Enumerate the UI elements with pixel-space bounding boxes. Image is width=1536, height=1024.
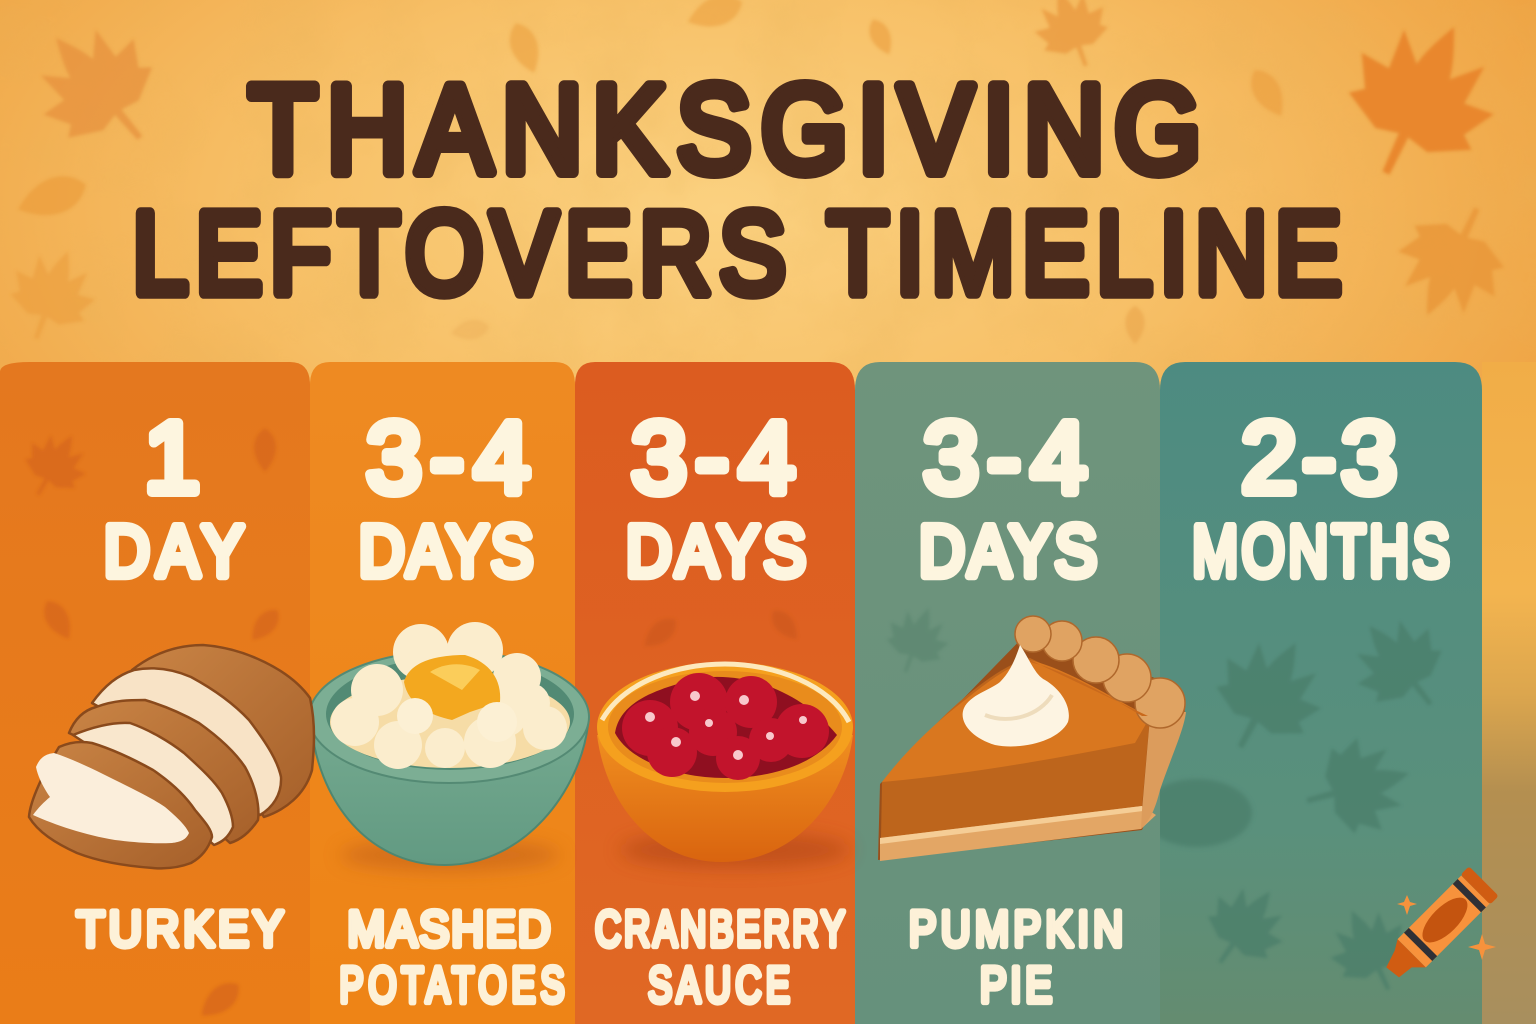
duration: 3-4 days: DAYS [359, 512, 533, 592]
panel: 2-3 months [1142, 362, 1482, 1024]
duration: 3-4 days: DAYS [919, 512, 1097, 592]
decorative autumn leaves [0, 0, 1525, 353]
label: mashed potatoes: POTATOES [340, 958, 565, 1013]
label: turkey: TURKEY [77, 902, 284, 957]
icon: crayon with sparkles [1377, 866, 1499, 988]
label: pumpkin pie: PUMPKIN [909, 901, 1123, 957]
duration: 3-4 days: 3 [923, 402, 979, 514]
icon: slice of pumpkin pie [878, 616, 1186, 861]
title: THANKSGIVING [249, 60, 1201, 198]
label: mashed potatoes: MASHED [347, 902, 551, 958]
icon: bowl of mashed potatoes [309, 622, 589, 871]
duration: 3-4 days [626, 402, 806, 592]
title [132, 60, 1342, 318]
duration: 3-4 days: 4 [474, 402, 530, 514]
duration: 2-3 months [1192, 402, 1449, 592]
duration: 1 day [104, 402, 244, 592]
panel: mashed potatoes, 3-4 days [309, 362, 589, 1024]
label: cranberry sauce: SAUCE [648, 958, 790, 1013]
label: mashed potatoes [340, 902, 565, 1013]
duration: 1 day: DAY [104, 512, 244, 592]
label: pumpkin pie [909, 901, 1123, 1013]
duration: 3-4 days [359, 402, 533, 592]
duration: 3-4 days: 4 [1031, 402, 1087, 514]
label: cranberry sauce: CRANBERRY [595, 902, 845, 957]
label: pumpkin pie: PIE [980, 957, 1052, 1013]
panel: cranberry sauce, 3-4 days [575, 362, 855, 1024]
label: cranberry sauce [595, 902, 845, 1013]
duration: 3-4 days: - [987, 402, 1021, 514]
icon: sliced turkey [29, 645, 314, 868]
panel: pumpkin pie, 3-4 days [855, 362, 1186, 1024]
title: LEFTOVERS TIMELINE [132, 188, 1342, 318]
duration: 3-4 days: - [695, 402, 729, 514]
duration: 3-4 days: - [430, 402, 464, 514]
duration: 3-4 days: 4 [739, 402, 795, 514]
duration: 1 day: 1 [144, 402, 200, 514]
duration: 3-4 days: 3 [366, 402, 422, 514]
duration: 2-3 months: 3 [1341, 402, 1397, 514]
icon: bowl of cranberry sauce [597, 662, 853, 868]
duration: 3-4 days [919, 402, 1097, 592]
duration: 3-4 days: DAYS [626, 512, 806, 592]
panel: turkey, 1 day [0, 362, 314, 1024]
duration: 3-4 days: 3 [631, 402, 687, 514]
duration: 2-3 months: MONTHS [1192, 511, 1449, 592]
duration: 2-3 months: 2 [1241, 402, 1297, 514]
duration: 2-3 months: - [1302, 402, 1336, 514]
